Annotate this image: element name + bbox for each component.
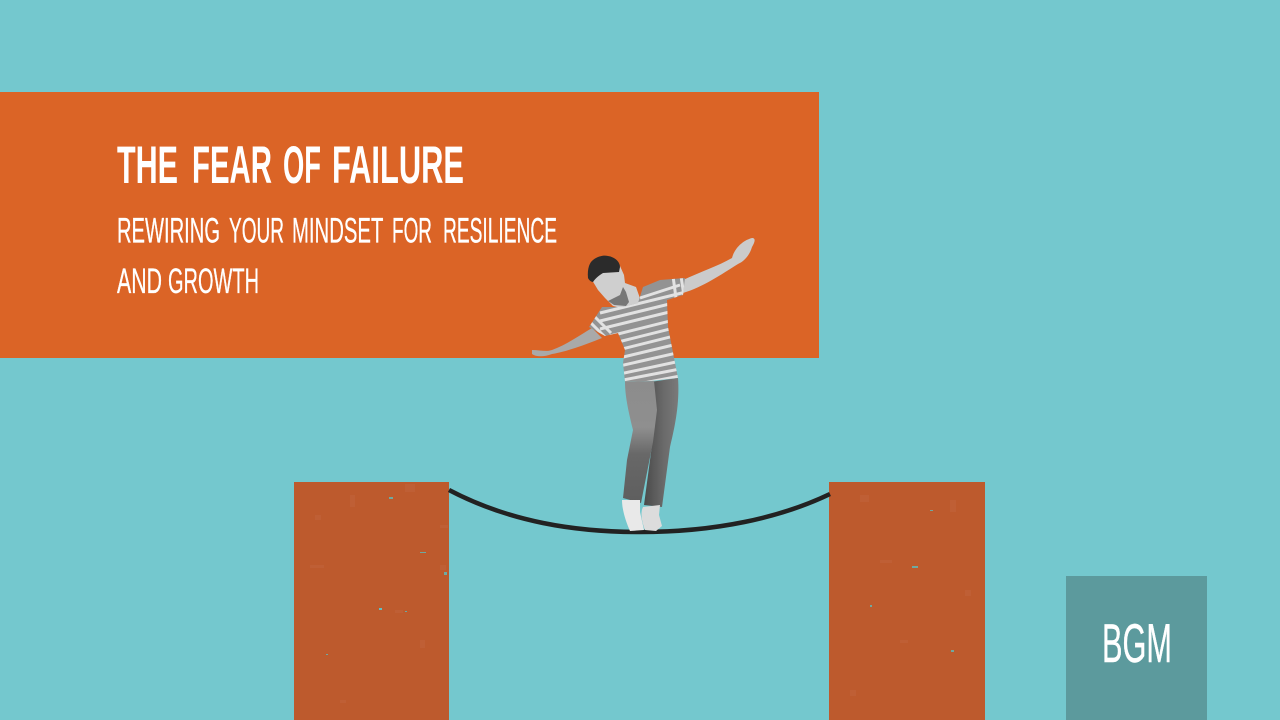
shirt (589, 278, 685, 382)
title: THE (117, 136, 178, 195)
shoe: left (622, 500, 644, 531)
panel: right pillar (829, 482, 985, 720)
subtitle: FOR (392, 212, 432, 250)
panel: left pillar (294, 482, 449, 720)
logo text: BGM (1102, 612, 1172, 674)
arm: raised right arm (683, 238, 755, 293)
panel: BGM logo box (1066, 576, 1207, 720)
title: FAILURE (332, 136, 464, 195)
trousers: left leg (623, 381, 657, 503)
hair (588, 256, 620, 282)
beard (608, 287, 629, 306)
title: OF (283, 136, 321, 195)
trousers: right leg (644, 378, 678, 507)
arm: lowered left arm (532, 328, 602, 356)
subtitle: YOUR (229, 212, 284, 250)
title: FEAR (192, 136, 272, 195)
panel: title banner (0, 92, 819, 358)
subtitle: AND (117, 262, 162, 301)
subtitle: MINDSET (292, 212, 383, 250)
subtitle: GROWTH (168, 262, 259, 301)
tightrope (449, 490, 830, 532)
shoe: right (642, 505, 662, 531)
subtitle: RESILIENCE (443, 212, 557, 250)
subtitle (117, 212, 557, 301)
subtitle: REWIRING (117, 212, 220, 250)
figure: man balancing on the rope (532, 238, 755, 531)
neck and face (592, 266, 642, 309)
